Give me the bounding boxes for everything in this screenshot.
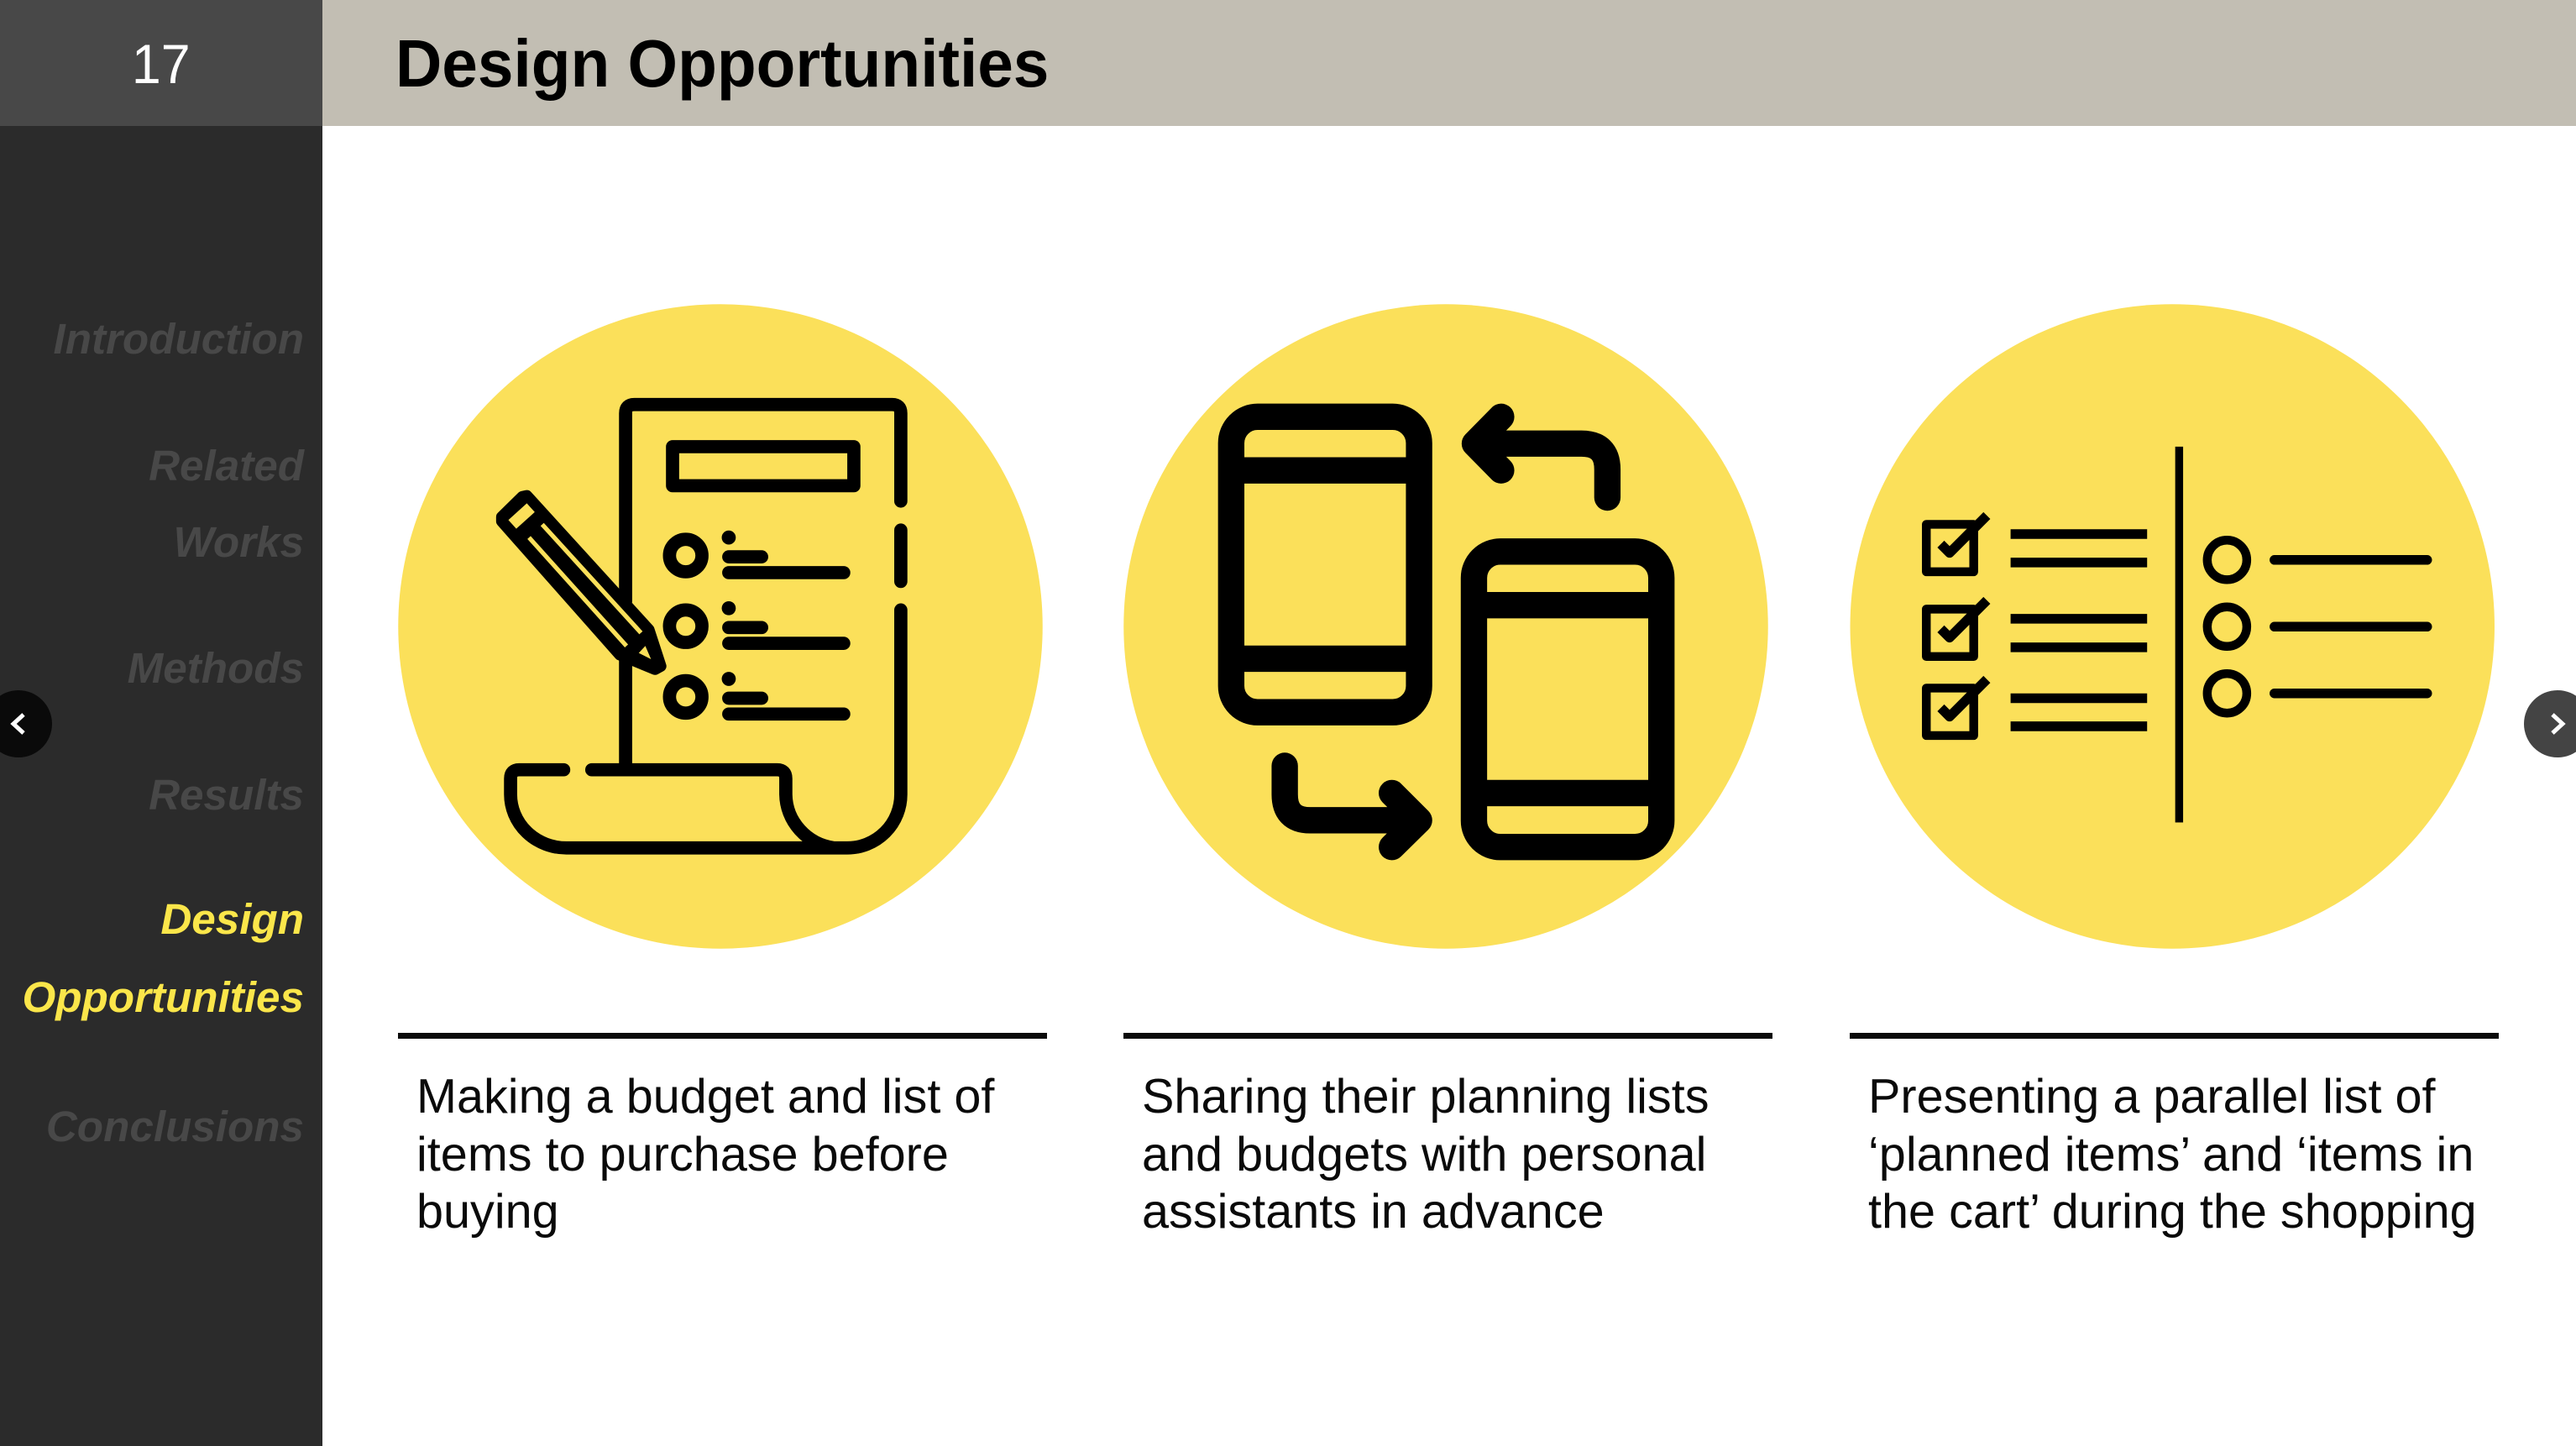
nav: Results: Results [149,771,304,819]
slide number: 17 [132,33,191,95]
caption [416,1070,994,1239]
nav: Related Works [149,442,305,566]
panel: budget and list [398,304,1047,1239]
panel: parallel list [1850,304,2499,1239]
icon: checklist and planned list [1851,304,2495,949]
icon: paper list with pencil [398,304,1043,949]
header bar [322,0,2576,126]
nav: Methods: Methods [128,644,304,692]
nav: Design Opportunities (active) [22,895,304,1021]
caption: items to purchase before [416,1127,949,1181]
caption: ‘planned items’ and ‘items in [1868,1127,2474,1181]
rule [1123,1033,1772,1039]
nav: Design Opportunities (active): Opportunities [22,973,304,1021]
panel: sharing with assistants [1123,304,1772,1239]
caption: the cart’ during the shopping [1868,1185,2477,1239]
title: Design Opportunities [395,26,1049,101]
caption: and budgets with personal [1142,1127,1706,1181]
caption [1868,1070,2477,1239]
rule [1850,1033,2499,1039]
nav: Related Works: Related [149,442,304,490]
nav: Introduction: Introduction [53,315,304,363]
nav: Design Opportunities (active): Design [160,895,304,943]
previous button [0,690,52,757]
caption: Presenting a parallel list of [1868,1070,2435,1124]
nav: Conclusions: Conclusions [46,1103,304,1150]
caption: buying [416,1185,559,1239]
rule [398,1033,1047,1039]
caption [1142,1070,1709,1239]
icon: two phones exchanging [1123,304,1768,949]
slide number [0,0,322,126]
caption: assistants in advance [1142,1185,1605,1239]
sidebar panel [0,0,322,1446]
caption: Making a budget and list of [416,1070,994,1124]
next button [2524,690,2576,757]
caption: Sharing their planning lists [1142,1070,1709,1124]
nav: Related Works: Works [173,518,304,566]
